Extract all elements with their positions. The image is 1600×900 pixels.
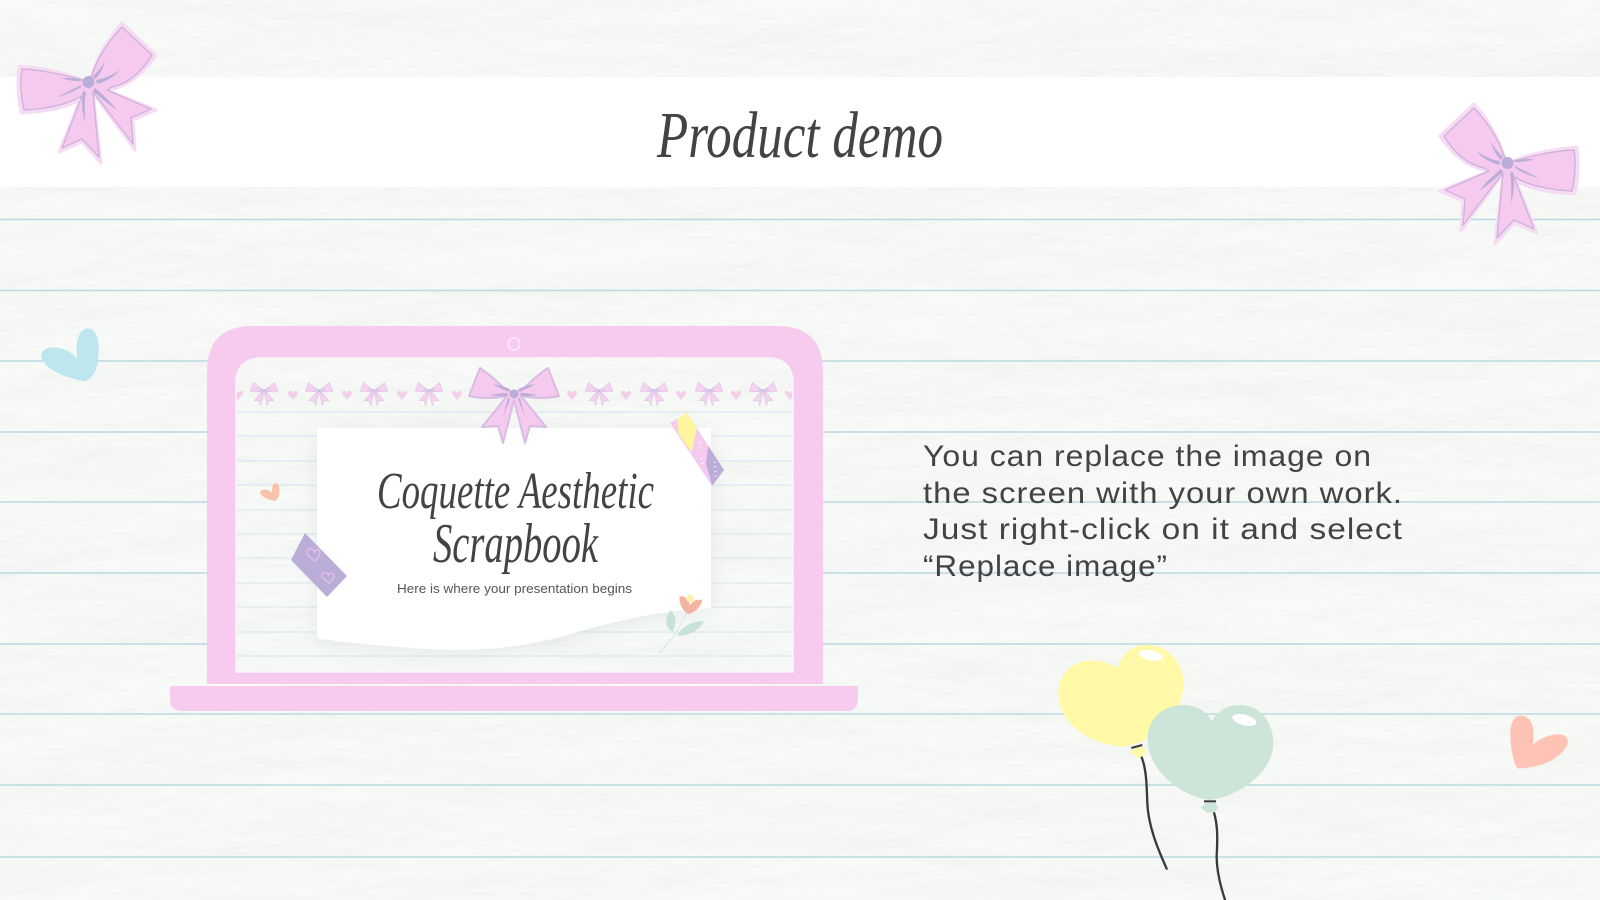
small peach heart (260, 483, 279, 501)
laptop body (207, 326, 823, 684)
center bow (469, 368, 559, 443)
icon: bow top left (18, 23, 156, 163)
flower (658, 595, 704, 654)
icon: peach heart (1510, 716, 1568, 768)
camera (508, 338, 520, 350)
notebook ruled lines (0, 220, 1600, 857)
icon: bow top right (1440, 104, 1578, 244)
laptop (170, 326, 858, 711)
washi tape top right (670, 413, 724, 486)
screen ruled lines (236, 412, 793, 656)
card subtitle: Here is where your presentation begins (397, 582, 632, 596)
body text: the screen with your own work. (923, 477, 1403, 510)
icon: blue heart (41, 328, 99, 381)
row of mini bows (233, 383, 795, 406)
body text (923, 440, 1403, 583)
title band (0, 77, 1600, 187)
body text: You can replace the image on (923, 440, 1372, 473)
laptop screen (233, 358, 795, 672)
washi tape left (291, 533, 347, 597)
yellow balloon (1058, 645, 1183, 869)
laptop base (170, 686, 858, 711)
title: Product demo (656, 99, 943, 172)
card heading line 2: Scrapbook (433, 513, 599, 575)
body text: Just right-click on it and select (923, 513, 1403, 546)
screen border (236, 358, 793, 672)
card heading: Coquette Aesthetic (377, 463, 654, 520)
body text: “Replace image” (923, 550, 1168, 583)
green balloon (1148, 705, 1273, 900)
paper card (317, 428, 711, 650)
balloons (1058, 645, 1273, 900)
